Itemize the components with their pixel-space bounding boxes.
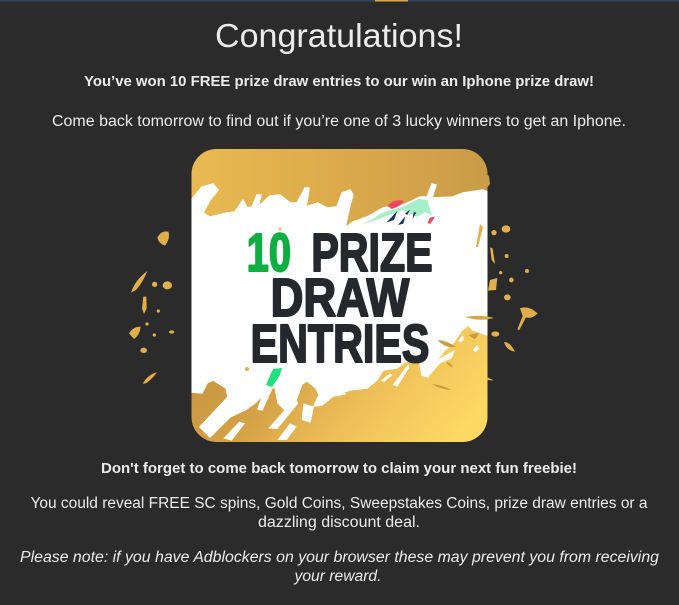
prize label: PRIZE bbox=[311, 223, 433, 283]
prize label: 10 bbox=[247, 223, 291, 283]
adblocker note: Please note: if you have Adblockers on your browser these may prevent you from receiving bbox=[20, 549, 659, 566]
white streaks: lower left bbox=[223, 399, 314, 441]
rewards description: You could reveal FREE SC spins, Gold Coins, Sweepstakes Coins, prize draw entries or a bbox=[30, 495, 648, 512]
come back message: Come back tomorrow to find out if you’re one of 3 lucky winners to get an Iphone. bbox=[52, 113, 626, 130]
reminder headline: Don't forget to come back tomorrow to claim your next fun freebie! bbox=[101, 460, 577, 477]
gold specks on white bbox=[476, 224, 483, 247]
prize label: DRAW bbox=[271, 268, 409, 328]
colored paint flecks bbox=[363, 199, 435, 225]
adblocker note: your reward. bbox=[293, 568, 382, 585]
gold streak over card edge bbox=[465, 316, 494, 320]
rewards description: dazzling discount deal. bbox=[258, 514, 420, 531]
gold splatter: left bbox=[129, 231, 174, 384]
gold card bbox=[191, 149, 494, 442]
white brush stroke bbox=[191, 184, 488, 437]
prize headline: You’ve won 10 FREE prize draw entries to our win an Iphone prize draw! bbox=[84, 73, 594, 90]
adblocker note bbox=[20, 549, 659, 585]
prize label: ENTRIES bbox=[251, 314, 429, 374]
gold splatter: right bbox=[488, 225, 538, 381]
title: Congratulations! bbox=[215, 17, 463, 54]
rewards description bbox=[30, 495, 648, 531]
prize label bbox=[247, 223, 433, 374]
white flecks and gold flecks: lower right bbox=[381, 333, 479, 390]
prize graphic bbox=[129, 149, 538, 442]
